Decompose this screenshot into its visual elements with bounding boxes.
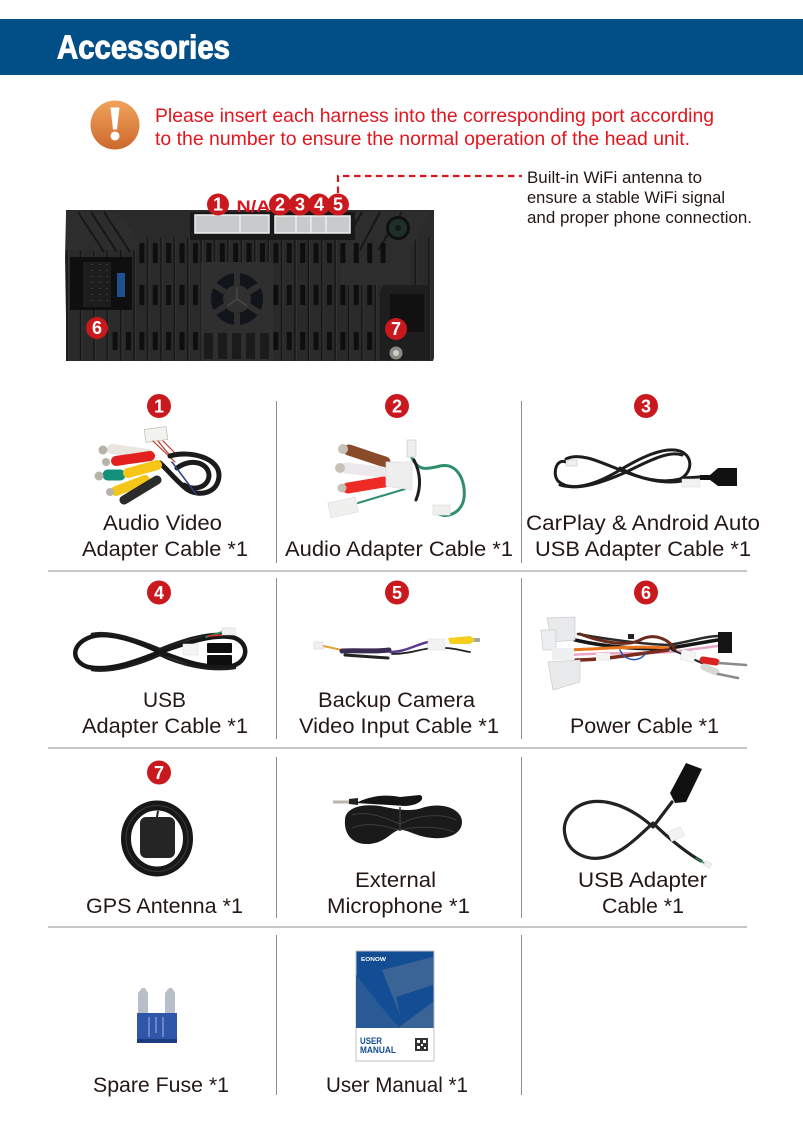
label: Spare Fuse *1 (93, 1074, 229, 1097)
microphone photo (333, 795, 462, 844)
panel: audio adapter cable (285, 394, 513, 561)
port label 5 (327, 194, 349, 216)
badge 2: 2 (392, 396, 402, 416)
badge 4: 4 (154, 583, 164, 603)
manual cover: EONOW (361, 957, 387, 963)
GPS port recess (380, 285, 430, 360)
cable photo (555, 450, 737, 487)
grid dividers (48, 401, 747, 1095)
port label 4 (308, 194, 330, 216)
label: Microphone *1 (327, 895, 470, 918)
dashed leader line (338, 176, 522, 193)
callout text: ensure a stable WiFi signal (527, 189, 725, 207)
panel: spare fuse (93, 988, 229, 1097)
port label 6: 6 (92, 318, 102, 338)
panel: carplay and android auto usb adapter cable (526, 394, 760, 561)
port label 4: 4 (314, 194, 324, 214)
callout text: and proper phone connection. (527, 209, 752, 227)
panel: external microphone (327, 795, 470, 918)
port label 7: 7 (391, 319, 401, 339)
manual cover: USER (360, 1036, 382, 1046)
label: Power Cable *1 (570, 715, 719, 738)
badge 6 (634, 580, 658, 604)
cable photo (94, 427, 219, 500)
label: Audio Adapter Cable *1 (285, 538, 513, 561)
port label 7 (385, 318, 407, 340)
callout text: Built-in WiFi antenna to (527, 169, 702, 187)
badge 5 (385, 580, 409, 604)
WiFi callout (338, 169, 752, 227)
warning text: Please insert each harness into the corresponding port according (155, 105, 714, 127)
port label 3 (289, 194, 311, 216)
port label 3: 3 (295, 194, 305, 214)
round antenna port (386, 216, 410, 240)
label: Adapter Cable *1 (82, 715, 248, 738)
label: CarPlay & Android Auto (526, 512, 760, 535)
panel: usb adapter cable (75, 580, 248, 738)
panel: power cable (541, 580, 746, 738)
label: GPS Antenna *1 (86, 895, 243, 918)
warning notice (90, 100, 714, 150)
head unit rear view (65, 194, 434, 361)
manual cover: MANUAL (360, 1045, 396, 1055)
header banner (0, 19, 803, 75)
badge 1 (147, 394, 171, 418)
badge 6: 6 (641, 583, 651, 603)
badge 1: 1 (154, 396, 164, 416)
badge 7: 7 (154, 763, 164, 783)
badge 5: 5 (392, 583, 402, 603)
label: USB Adapter Cable *1 (535, 538, 751, 561)
badge 3: 3 (641, 396, 651, 416)
QR code (415, 1038, 428, 1051)
fan vent (201, 262, 273, 361)
label: Video Input Cable *1 (299, 715, 499, 738)
warning text: to the number to ensure the normal operation of the head unit. (155, 128, 690, 150)
label: External (355, 869, 436, 892)
label: USB Adapter (578, 869, 707, 892)
badge 7 (147, 760, 171, 784)
antenna photo (126, 806, 188, 872)
label: Audio Video (103, 512, 222, 535)
port label 2: 2 (275, 194, 285, 214)
port label 2 (269, 194, 291, 216)
label: USB (143, 689, 186, 712)
title: Accessories (57, 28, 230, 66)
badge 4 (147, 580, 171, 604)
icon: exclamation (90, 100, 140, 150)
panel: gps antenna (86, 760, 243, 918)
label: User Manual *1 (326, 1074, 468, 1097)
fuse photo (137, 988, 177, 1043)
panel: backup camera video input cable (299, 580, 499, 738)
label: Backup Camera (318, 689, 475, 712)
power port recess (70, 257, 132, 310)
port label 5: 5 (333, 194, 343, 214)
panel: audio video adapter cable (82, 394, 248, 561)
cable photo (541, 617, 746, 690)
panel: usb adapter cable short (564, 763, 712, 918)
cable photo (328, 440, 464, 518)
label: Cable *1 (602, 895, 684, 918)
port label 1 (207, 194, 229, 216)
manual cover (356, 951, 434, 1061)
N/A label: N/A (236, 198, 271, 216)
cable photo (314, 636, 480, 658)
cable photo (564, 763, 712, 868)
port label 6 (86, 317, 108, 339)
harness connectors (195, 215, 350, 233)
badge 2 (385, 394, 409, 418)
panel: user manual (326, 951, 468, 1097)
badge 3 (634, 394, 658, 418)
cable photo (75, 628, 245, 671)
port label 1: 1 (213, 194, 223, 214)
label: Adapter Cable *1 (82, 538, 248, 561)
